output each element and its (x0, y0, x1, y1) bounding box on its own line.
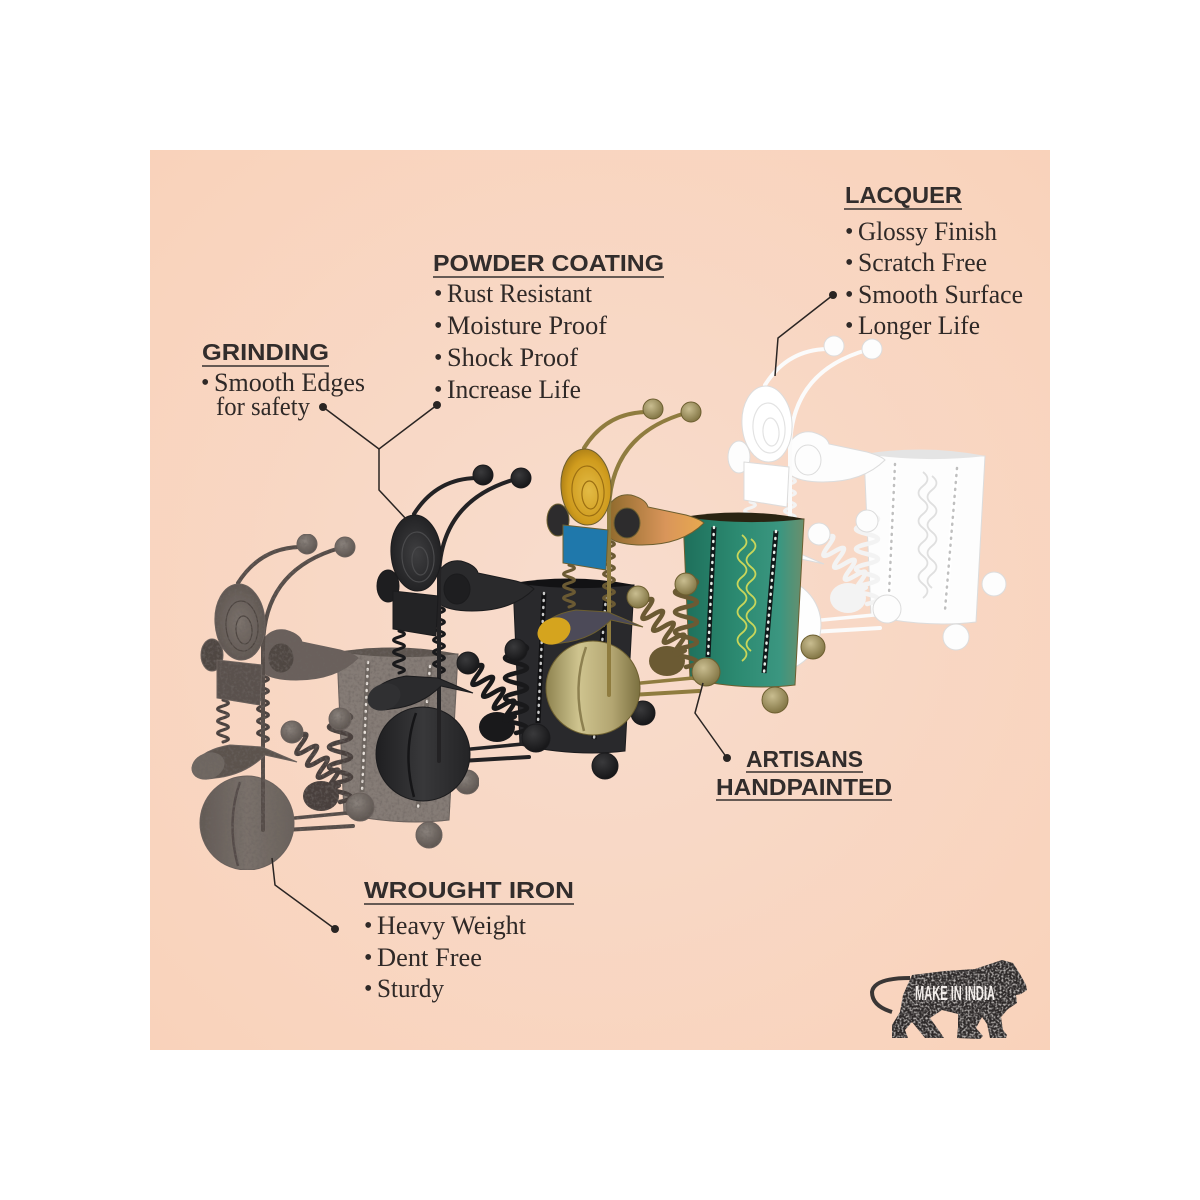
heading: WROUGHT IRON (364, 877, 574, 903)
callout: artisans handpainted (695, 683, 892, 800)
wheel (546, 641, 640, 735)
heading: ARTISANS (746, 746, 863, 772)
callout: wrought iron (272, 858, 574, 1003)
callout: artisans handpainted: HANDPAINTED (716, 774, 892, 800)
cup (683, 512, 825, 713)
list: Heavy Weight (377, 911, 527, 940)
legs (744, 478, 796, 544)
list: • (434, 345, 442, 371)
list: Increase Life (447, 375, 581, 404)
list: Dent Free (377, 943, 482, 972)
leader line (695, 683, 727, 758)
springs (281, 708, 374, 821)
leaf (714, 547, 824, 586)
product: wrought iron stage (grey) (187, 534, 479, 870)
callout: lacquer (775, 182, 1023, 376)
legs (218, 676, 268, 742)
logo: make in india lion (872, 960, 1027, 1039)
arms (765, 336, 882, 632)
list (201, 368, 365, 421)
cup (864, 449, 1006, 650)
axle (268, 813, 353, 831)
list: • (434, 281, 442, 307)
list (434, 279, 607, 404)
list: • (845, 250, 853, 276)
leaf (363, 676, 473, 715)
axle (444, 744, 529, 762)
list: for safety (216, 392, 310, 421)
list: • (845, 313, 853, 339)
spoon (212, 582, 268, 662)
back panel (744, 462, 789, 507)
list: • (364, 976, 372, 1002)
leaf (533, 610, 643, 649)
list: Sturdy (377, 974, 444, 1003)
white stage ghost over teal cup (714, 478, 824, 672)
wheel (727, 578, 821, 672)
list: • (434, 377, 442, 403)
list: Longer Life (858, 311, 980, 340)
leader line (323, 407, 379, 449)
seat dish (201, 630, 358, 680)
arms (414, 465, 531, 761)
list: • (845, 219, 853, 245)
arms (584, 399, 701, 695)
springs (627, 573, 720, 686)
leader dot (319, 403, 327, 411)
back panel (217, 660, 262, 705)
leader line (775, 295, 833, 376)
legs (394, 607, 444, 673)
list: • (434, 313, 442, 339)
callout: powder coating (379, 250, 664, 520)
lion body (892, 960, 1027, 1039)
wheel (376, 707, 470, 801)
legs (564, 541, 614, 607)
list (845, 217, 1023, 340)
list: Glossy Finish (858, 217, 997, 246)
list: Moisture Proof (447, 311, 607, 340)
heading: LACQUER (845, 182, 962, 208)
list: • (845, 282, 853, 308)
axle (614, 678, 699, 696)
seat dish (547, 495, 704, 545)
springs (808, 510, 901, 623)
leader dot (331, 925, 339, 933)
callout: grinding (201, 339, 379, 449)
leader line (272, 858, 335, 929)
lion tail (872, 978, 910, 1012)
seat dish (377, 561, 534, 611)
logo text: MAKE IN INDIA (915, 983, 995, 1005)
spoon (388, 513, 444, 593)
seat dish (728, 432, 885, 482)
wheel (200, 776, 294, 870)
list: Scratch Free (858, 248, 987, 277)
spoon (558, 447, 614, 527)
list: • (364, 945, 372, 971)
spoon (739, 384, 795, 464)
arms (238, 534, 355, 830)
springs (457, 639, 550, 752)
leader dot (433, 401, 441, 409)
heading: POWDER COATING (433, 250, 664, 276)
cup (337, 647, 479, 848)
axle (795, 615, 880, 633)
back panel (393, 591, 438, 636)
list: Shock Proof (447, 343, 578, 372)
back panel (563, 525, 608, 570)
product: powder coated stage (black) (363, 465, 655, 801)
product: handpainted stage (colour) (533, 399, 825, 735)
cup (513, 578, 655, 779)
list: Rust Resistant (447, 279, 593, 308)
background panel (150, 150, 1050, 1050)
leader dot (723, 754, 731, 762)
list: Smooth Surface (858, 280, 1023, 309)
leaf (187, 745, 297, 784)
leader line (379, 405, 437, 520)
list: • (364, 913, 372, 939)
list: Smooth Edges (214, 368, 365, 397)
list: • (201, 370, 209, 396)
heading: GRINDING (202, 339, 329, 365)
leader dot (829, 291, 837, 299)
product: lacquer stage (white) (714, 336, 1006, 672)
list (364, 911, 527, 1003)
